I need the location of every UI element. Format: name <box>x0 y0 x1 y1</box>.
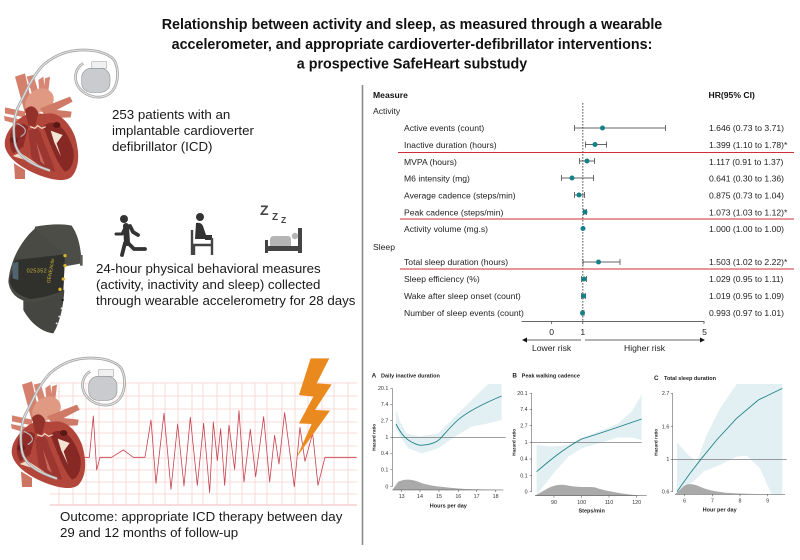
panel A: daily inactive duration: 7.4 <box>381 402 388 408</box>
hazard ratio values: 1.399 (1.10 to 1.78)* <box>709 140 788 150</box>
panel A: daily inactive duration: 0.1 <box>381 467 388 473</box>
measure labels: MVPA (hours) <box>404 157 457 167</box>
icon: wearable accelerometer watch <box>8 224 83 333</box>
panel A: daily inactive duration: 18 <box>493 494 499 500</box>
measure labels: Average cadence (steps/min) <box>404 190 516 200</box>
significance lines <box>398 152 794 269</box>
text: patient population <box>112 107 254 154</box>
icon: wearable accelerometer watch: 025352 <box>27 268 47 274</box>
panel A: daily inactive duration: 15 <box>436 494 442 500</box>
risk axis: 1 <box>580 327 585 337</box>
text: outcome: 29 and 12 months of follow-up <box>60 525 238 540</box>
hazard ratio values: 1.073 (1.03 to 1.12)* <box>709 208 788 218</box>
panel B: peak walking cadence: Peak walking cadence <box>522 374 580 380</box>
panel B: peak walking cadence: Steps/min <box>578 509 605 515</box>
panel B: peak walking cadence: 110 <box>605 500 613 506</box>
icon: running person <box>116 215 145 255</box>
divider <box>362 85 364 545</box>
panel B: peak walking cadence: 100 <box>577 500 586 506</box>
measure labels: M6 intensity (mg) <box>404 174 470 184</box>
icon: heart with defibrillator, outcome <box>11 358 125 488</box>
icon: sleeping in bed: Z <box>260 202 269 218</box>
icon: sitting person <box>192 213 213 255</box>
title <box>162 17 662 72</box>
icon: sleeping in bed <box>260 202 302 253</box>
icon: lightning bolt shock <box>297 358 332 457</box>
text: patient population: implantable cardioverter <box>112 123 254 138</box>
text: outcome: Outcome: appropriate ICD therapy between day <box>60 509 343 524</box>
risk axis: 5 <box>702 327 707 337</box>
panel A: daily inactive duration: 13 <box>399 494 405 500</box>
measure labels: Sleep efficiency (%) <box>404 274 480 284</box>
hazard ratio values: 0.993 (0.97 to 1.01) <box>709 308 784 318</box>
panel A: daily inactive duration <box>372 373 506 509</box>
panel A: daily inactive duration: Hazard ratio <box>372 424 377 451</box>
hazard ratio values: 0.875 (0.73 to 1.04) <box>709 190 784 200</box>
risk axis: Higher risk <box>624 343 666 353</box>
risk axis <box>522 322 707 353</box>
text: patient population: defibrillator (ICD) <box>112 139 212 154</box>
panel B: peak walking cadence: 7.4 <box>520 407 528 413</box>
chart: ECG arrhythmia trace <box>50 383 357 505</box>
panel C: total sleep duration <box>653 375 787 514</box>
icon: sleeping in bed: Z <box>272 212 278 223</box>
panel A: daily inactive duration: 14 <box>417 494 423 500</box>
forest plot <box>373 90 794 353</box>
panel A: daily inactive duration: 17 <box>474 494 480 500</box>
panel C: total sleep duration: Hazard ratio <box>653 429 658 456</box>
icon: heart with implanted defibrillator <box>4 50 118 180</box>
panel C: total sleep duration: 1.6 <box>662 424 669 430</box>
panel C: total sleep duration: C <box>654 375 659 382</box>
panel B: peak walking cadence: B <box>512 373 517 380</box>
panel B: peak walking cadence: 0.1 <box>520 473 528 479</box>
icon: wearable accelerometer watch: GENEActiv <box>46 258 56 284</box>
panel A: daily inactive duration: A <box>372 373 377 380</box>
header row <box>373 90 755 100</box>
measure labels: Total sleep duration (hours) <box>404 257 508 267</box>
measure labels: Inactive duration (hours) <box>404 140 497 150</box>
confidence intervals <box>562 125 666 316</box>
panel A: daily inactive duration: 2.7 <box>381 418 388 424</box>
panel B: peak walking cadence: 120 <box>632 500 641 506</box>
measure labels: Number of sleep events (count) <box>404 308 524 318</box>
hazard ratio values: 1.117 (0.91 to 1.37) <box>709 157 784 167</box>
panel C: total sleep duration: 6 <box>683 499 686 505</box>
point estimates <box>570 126 605 316</box>
measure labels: Active events (count) <box>404 123 484 133</box>
hazard ratio values <box>709 123 788 318</box>
text: outcome <box>60 509 343 540</box>
panel A: daily inactive duration: Hours per day <box>430 503 468 509</box>
panel C: total sleep duration: 1 <box>666 457 669 463</box>
header row: HR(95% CI) <box>708 90 755 100</box>
hazard ratio values: 1.029 (0.95 to 1.11) <box>709 274 784 284</box>
measure labels <box>373 106 524 318</box>
panel C: total sleep duration: 2.7 <box>662 391 669 397</box>
text: physical behavioral measures: (activity, inactivity and sleep) collected <box>96 277 320 292</box>
panel B: peak walking cadence: 0.4 <box>520 457 528 463</box>
hazard ratio values: 1.019 (0.95 to 1.09) <box>709 291 784 301</box>
panel A: daily inactive duration: Daily inactive duration <box>381 374 440 380</box>
panel A: daily inactive duration: 1 <box>385 435 388 441</box>
text: physical behavioral measures: 24-hour physical behavioral measures <box>96 261 321 276</box>
header row: Measure <box>373 90 408 100</box>
measure labels: Activity <box>373 106 401 116</box>
panel A: daily inactive duration: 16 <box>455 494 461 500</box>
panel B: peak walking cadence <box>512 373 647 515</box>
measure labels: Peak cadence (steps/min) <box>404 208 503 218</box>
panel C: total sleep duration: Hour per day <box>703 508 738 514</box>
hazard ratio values: 1.646 (0.73 to 3.71) <box>709 123 784 133</box>
panel B: peak walking cadence: 20.1 <box>517 391 528 397</box>
text: physical behavioral measures: through wearable accelerometry for 28 days <box>96 293 356 308</box>
icon: sleeping in bed: Z <box>281 215 286 225</box>
panel C: total sleep duration: 8 <box>738 499 741 505</box>
measure labels: Sleep <box>373 242 395 252</box>
title: a prospective SafeHeart substudy <box>297 56 527 72</box>
text: patient population: 253 patients with an <box>112 107 230 122</box>
hazard ratio values: 0.641 (0.30 to 1.36) <box>709 174 784 184</box>
panel B: peak walking cadence: 90 <box>551 500 557 506</box>
measure labels: Wake after sleep onset (count) <box>404 291 521 301</box>
panel A: daily inactive duration: 0.4 <box>381 451 388 457</box>
panel A: daily inactive duration: 20.1 <box>378 386 388 392</box>
risk axis: 0 <box>549 327 554 337</box>
panel B: peak walking cadence: 2.7 <box>520 423 528 429</box>
title: Relationship between activity and sleep, as measured through a wearable <box>162 17 662 33</box>
panel C: total sleep duration: 0.6 <box>662 489 669 495</box>
measure labels: Activity volume (mg.s) <box>404 224 488 234</box>
panel B: peak walking cadence: Hazard ratio <box>512 429 517 456</box>
panel B: peak walking cadence: 1 <box>525 440 528 446</box>
panel B: peak walking cadence: 0 <box>525 489 528 495</box>
title: accelerometer, and appropriate cardioverter-defibrillator interventions: <box>172 37 652 53</box>
text: physical behavioral measures <box>96 261 356 308</box>
risk axis: Lower risk <box>532 343 572 353</box>
panel A: daily inactive duration: 0 <box>385 484 388 490</box>
panel C: total sleep duration: 9 <box>766 499 769 505</box>
panel C: total sleep duration: 7 <box>711 499 714 505</box>
panel C: total sleep duration: Total sleep duration <box>664 376 717 382</box>
hazard ratio values: 1.503 (1.02 to 2.22)* <box>709 257 788 267</box>
hazard ratio values: 1.000 (1.00 to 1.00) <box>709 224 784 234</box>
